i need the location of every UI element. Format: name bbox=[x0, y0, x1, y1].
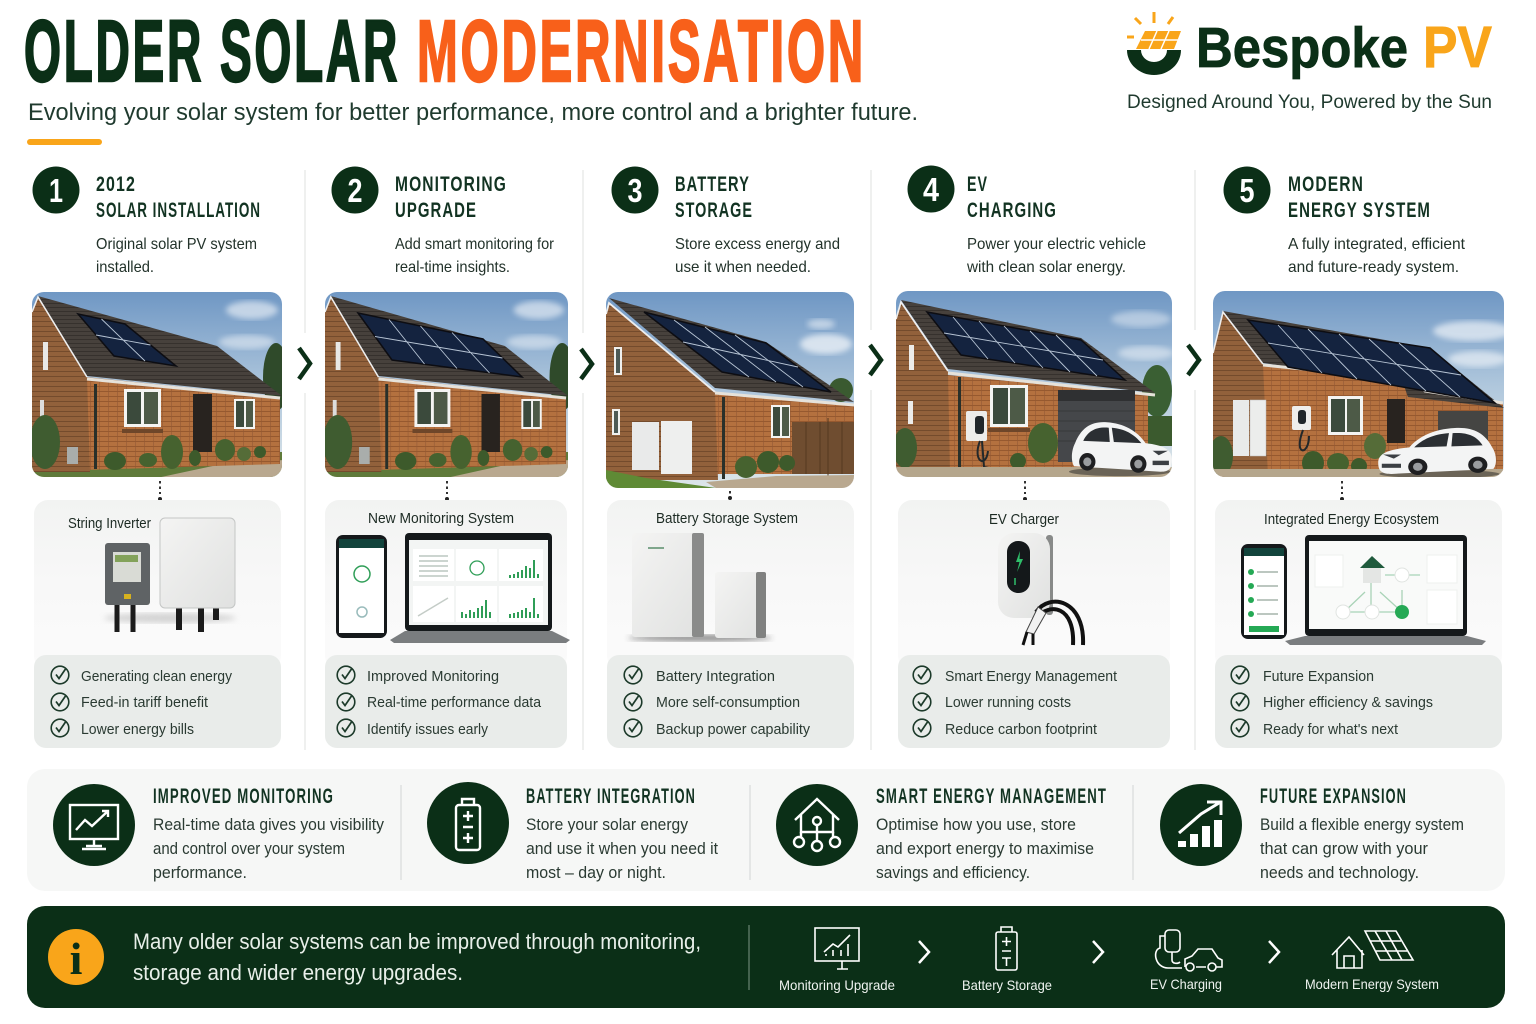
text: future expansion bbox=[1260, 785, 1464, 882]
modern energy system step bbox=[1305, 931, 1439, 992]
text: future expansion: FUTURE EXPANSION bbox=[1260, 785, 1407, 808]
step 2 header: 2 bbox=[348, 172, 362, 209]
list: step 2 benefits: Improved Monitoring bbox=[367, 668, 499, 685]
accent bar bbox=[27, 139, 102, 145]
panel: EV charger: EV Charger bbox=[989, 511, 1059, 528]
list: step 4 benefits: Lower running costs bbox=[945, 694, 1071, 711]
step 5 header bbox=[1224, 166, 1466, 276]
battery storage step bbox=[962, 927, 1052, 993]
panel: new monitoring system: New Monitoring System bbox=[368, 510, 514, 527]
list: step 2 benefits bbox=[325, 655, 567, 748]
logo: Bespoke bbox=[1196, 16, 1408, 80]
callout text: storage and wider energy upgrades. bbox=[133, 960, 463, 985]
panel: key benefits strip bbox=[27, 769, 1505, 891]
panel: integrated energy ecosystem bbox=[1215, 500, 1502, 670]
title: MODERNISATION bbox=[417, 3, 866, 100]
panel: battery storage system: Battery Storage System bbox=[656, 510, 798, 527]
EV charging step: EV Charging bbox=[1150, 976, 1222, 992]
connector dots bbox=[158, 481, 1344, 501]
step 5 header: MODERN bbox=[1288, 173, 1364, 196]
title: OLDER SOLAR bbox=[24, 3, 400, 100]
icon: smart home network bbox=[776, 784, 858, 866]
list: step 1 benefits: Lower energy bills bbox=[81, 721, 194, 738]
text: battery integration bbox=[526, 785, 718, 882]
icon: meter and inverter bbox=[104, 518, 236, 632]
arrow bbox=[919, 941, 929, 963]
step 3 header: Store excess energy and bbox=[675, 236, 840, 253]
text: future expansion: that can grow with your bbox=[1260, 839, 1428, 858]
text: improved monitoring bbox=[153, 785, 384, 882]
list: step 4 benefits: Reduce carbon footprint bbox=[945, 721, 1098, 738]
arrow bbox=[1269, 941, 1279, 963]
list: step 1 benefits: Generating clean energy bbox=[81, 668, 232, 685]
list: step 3 benefits: More self-consumption bbox=[656, 694, 800, 711]
list: step 4 benefits bbox=[898, 655, 1170, 748]
photo: house with EV charger and car bbox=[893, 291, 1174, 477]
step 3 header: BATTERY bbox=[675, 173, 750, 196]
step 4 header bbox=[908, 166, 1146, 276]
step 4 header: EV bbox=[967, 173, 988, 196]
text: smart energy management: SMART ENERGY MANAGEMENT bbox=[876, 785, 1107, 808]
list: step 5 benefits bbox=[1215, 655, 1502, 748]
icon: info: i bbox=[70, 933, 83, 984]
step 3 header: 3 bbox=[628, 172, 642, 209]
text: smart energy management: and export energy to maximise bbox=[876, 839, 1094, 858]
panel: new monitoring system bbox=[325, 500, 570, 670]
step 5 header: A fully integrated, efficient bbox=[1288, 236, 1466, 253]
photo: fully integrated modern home bbox=[1209, 291, 1513, 478]
icon: laptop dashboard bbox=[390, 533, 570, 643]
text: improved monitoring: IMPROVED MONITORING bbox=[153, 785, 334, 808]
step 5 header: and future-ready system. bbox=[1288, 259, 1459, 276]
list: step 5 benefits: Higher efficiency & savings bbox=[1263, 694, 1433, 711]
logo bbox=[1127, 12, 1492, 113]
text: improved monitoring: performance. bbox=[153, 863, 247, 882]
step 3 header: use it when needed. bbox=[675, 259, 811, 276]
icon: monitoring bbox=[53, 784, 135, 866]
list: step 2 benefits: Identify issues early bbox=[367, 721, 488, 738]
battery storage step: Battery Storage bbox=[962, 977, 1052, 993]
text: improved monitoring: Real-time data gives you visibility bbox=[153, 815, 384, 834]
text: battery integration: most – day or night. bbox=[526, 863, 666, 882]
list: step 4 benefits: Smart Energy Management bbox=[945, 668, 1118, 685]
logo: Designed Around You, Powered by the Sun bbox=[1127, 92, 1492, 113]
text: future expansion: needs and technology. bbox=[1260, 863, 1419, 882]
arrow 2 bbox=[581, 349, 592, 379]
icon: phone bbox=[336, 535, 387, 638]
icon: wall charger with cable bbox=[998, 533, 1083, 645]
list: step 1 benefits: Feed-in tariff benefit bbox=[81, 694, 209, 711]
step 4 header: 4 bbox=[923, 171, 940, 208]
text: future expansion: Build a flexible energy system bbox=[1260, 815, 1464, 834]
panel: battery storage system bbox=[607, 500, 854, 670]
monitoring upgrade step bbox=[779, 928, 895, 993]
step 2 header: real-time insights. bbox=[395, 259, 510, 276]
step 1 header: 2012 bbox=[96, 173, 136, 196]
text: battery integration: BATTERY INTEGRATION bbox=[526, 785, 696, 808]
icon: growth chart bbox=[1160, 784, 1242, 866]
step 5 header: 5 bbox=[1240, 172, 1254, 209]
text: smart energy management: savings and efficiency. bbox=[876, 863, 1030, 882]
EV charging step bbox=[1150, 930, 1222, 992]
icon: laptop energy diagram bbox=[1285, 535, 1486, 645]
arrow bbox=[1093, 941, 1103, 963]
step 5 header: ENERGY SYSTEM bbox=[1288, 199, 1431, 222]
panel: string inverter bbox=[34, 500, 281, 670]
panel: footer banner bbox=[27, 906, 1505, 1008]
text: smart energy management bbox=[876, 785, 1107, 882]
list: step 5 benefits: Ready for what's next bbox=[1263, 721, 1399, 738]
step 4 header: CHARGING bbox=[967, 199, 1057, 222]
panel: string inverter: String Inverter bbox=[68, 515, 151, 532]
step 1 header: 1 bbox=[49, 172, 63, 209]
icon: sun and solar panel bbox=[1127, 12, 1181, 75]
panel: integrated energy ecosystem: Integrated Energy Ecosystem bbox=[1264, 511, 1439, 528]
icon: info bbox=[48, 929, 104, 985]
list: step 1 benefits bbox=[34, 655, 281, 748]
logo: PV bbox=[1423, 15, 1492, 80]
text: improved monitoring: and control over your system bbox=[153, 839, 345, 858]
icon: battery units bbox=[628, 533, 772, 641]
list: step 2 benefits: Real-time performance data bbox=[367, 694, 542, 711]
list: step 5 benefits: Future Expansion bbox=[1263, 668, 1374, 685]
callout text bbox=[133, 929, 701, 985]
text: smart energy management: Optimise how you use, store bbox=[876, 815, 1076, 834]
list: step 3 benefits: Backup power capability bbox=[656, 721, 810, 738]
photo: house with battery storage bbox=[606, 292, 856, 492]
step 2 header: Add smart monitoring for bbox=[395, 236, 555, 253]
icon: battery bbox=[427, 782, 509, 864]
monitoring upgrade step: Monitoring Upgrade bbox=[779, 977, 895, 993]
step 1 header: Original solar PV system bbox=[96, 236, 257, 253]
photo: 2012 house with small array bbox=[30, 292, 289, 482]
step 1 header bbox=[32, 166, 261, 276]
icon: phone bbox=[1241, 544, 1287, 639]
arrow 1 bbox=[299, 348, 310, 379]
text: battery integration: and use it when you need it bbox=[526, 839, 718, 858]
photo: house with monitoring and larger array bbox=[323, 292, 575, 482]
list: step 3 benefits bbox=[607, 655, 854, 748]
step 2 header: UPGRADE bbox=[395, 199, 477, 222]
modern energy system step: Modern Energy System bbox=[1305, 976, 1439, 992]
arrow 4 bbox=[1188, 345, 1199, 375]
step 3 header: STORAGE bbox=[675, 199, 753, 222]
text: battery integration: Store your solar energy bbox=[526, 815, 688, 834]
step 2 header: MONITORING bbox=[395, 173, 507, 196]
panel: EV charger bbox=[898, 500, 1170, 670]
step 4 header: Power your electric vehicle bbox=[967, 236, 1146, 253]
step 2 header bbox=[332, 166, 555, 276]
step 1 header: installed. bbox=[96, 259, 154, 276]
step 4 header: with clean solar energy. bbox=[966, 259, 1126, 276]
arrow 3 bbox=[870, 345, 881, 375]
subtitle: Evolving your solar system for better performance, more control and a brighter future. bbox=[28, 99, 918, 126]
step 1 header: SOLAR INSTALLATION bbox=[96, 199, 261, 222]
callout text: Many older solar systems can be improved through monitoring, bbox=[133, 929, 701, 954]
step 3 header bbox=[612, 166, 840, 276]
list: step 3 benefits: Battery Integration bbox=[656, 668, 775, 685]
